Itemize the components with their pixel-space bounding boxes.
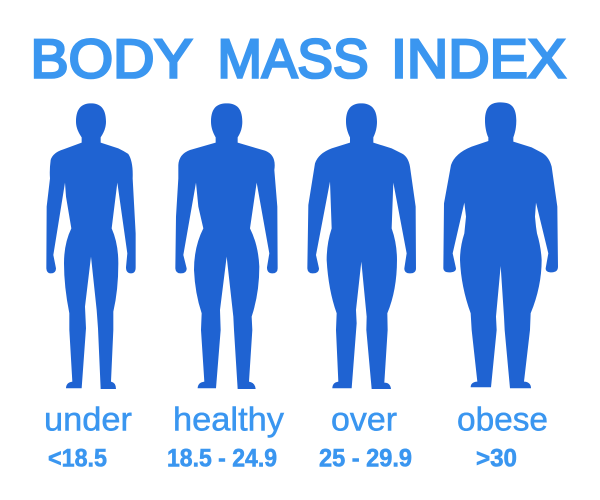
category labels: healthy [173,400,285,438]
title: INDEX [391,28,566,90]
category labels: obese [457,400,548,438]
BMI ranges [48,444,517,472]
figure: over [307,103,416,389]
BMI ranges: 18.5 - 24.9 [167,444,277,472]
category labels [44,400,548,438]
figure: obese [443,102,558,388]
category labels: under [44,400,132,438]
BMI ranges: >30 [476,444,517,472]
BMI ranges: 25 - 29.9 [319,444,412,472]
title: MASS [218,28,368,90]
title [30,28,566,90]
BMI ranges: <18.5 [48,444,107,472]
figure: healthy [175,103,278,389]
figure: under [46,103,136,389]
category labels: over [331,400,397,438]
title: BODY [30,28,193,90]
